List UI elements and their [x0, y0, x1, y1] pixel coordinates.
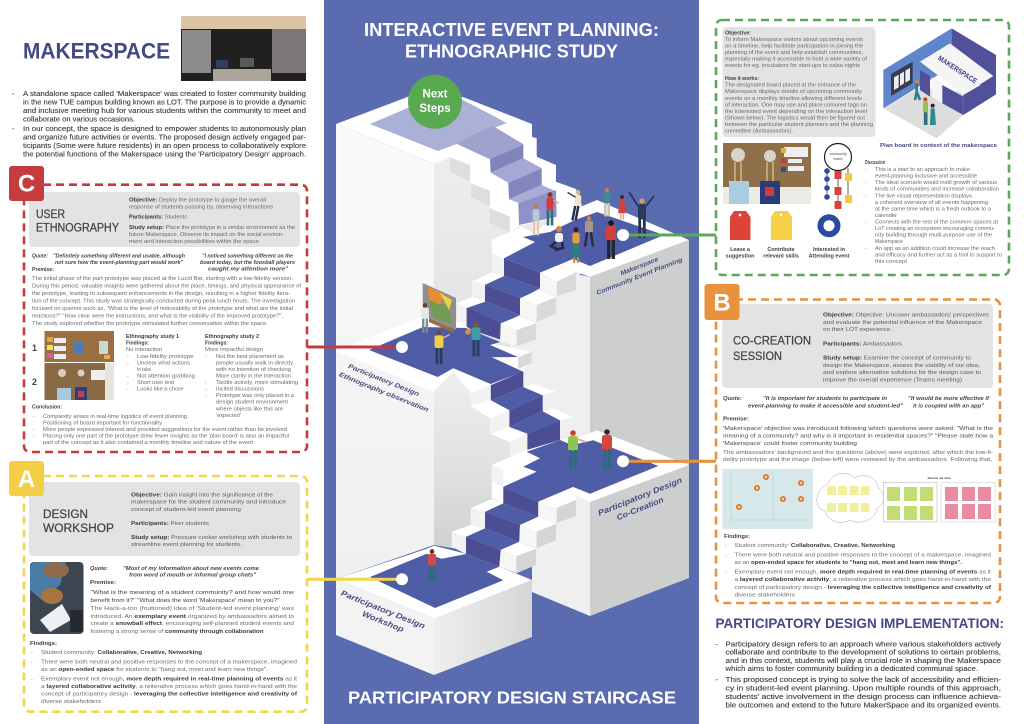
findings B: Findings:: [724, 534, 750, 540]
badge B: B: [713, 290, 731, 316]
premise C: Premise:: [32, 267, 54, 273]
badge A: [9, 461, 44, 496]
heading: design workshop: DESIGN: [43, 509, 88, 521]
isometric makerspace illustration: MAKERSPACE: [936, 53, 979, 86]
findings A: as an open-ended space for students to "hang out, meet and learn new things".: [41, 667, 268, 673]
study summary A: makerspace for the student community and introduce: [131, 500, 286, 506]
implementation text: Participatory design refers to an approach where various stakeholders actively: [726, 642, 1002, 648]
findings A: [30, 641, 298, 705]
quotes B: [723, 396, 990, 410]
board: review our idea: [884, 476, 995, 522]
findings study 1: to take: [137, 367, 151, 373]
findings A: concept of participatory design - leveraging the collective intelligence and creativity of: [41, 692, 297, 698]
findings study 1: -: [127, 380, 129, 386]
findings study 1: Unclear what actions: [137, 360, 190, 366]
center panel background: [324, 0, 699, 724]
findings study 2: design student environment: [216, 400, 289, 406]
discussion: -: [865, 180, 867, 186]
discussion: -: [865, 194, 867, 200]
objective and how it works: [725, 30, 873, 134]
study summary A: Study setup: Pressure cooker workshop with students to: [131, 535, 292, 541]
objective and how it works: planning of the event and help establish communities,: [725, 50, 863, 56]
implementation text: collaborate and contribute to the development of solutions to certain problems,: [726, 650, 1001, 656]
heading: user ethnography: [36, 209, 119, 234]
discussion: calender: [875, 213, 897, 219]
discussion: -: [865, 220, 867, 226]
caption: plan board: Plan board in context of the makerspace: [880, 143, 997, 149]
isometric staircase illustration: [336, 96, 689, 675]
study summary B: improve the overall experience (Teams meeting): [823, 378, 962, 384]
findings A: a layered collaborative activity , a reiterative process which goes hand-in-hand with the: [41, 684, 297, 690]
findings study 2: with no intention of checking: [216, 367, 291, 373]
study summary B: on their LOT experience.: [823, 327, 893, 333]
tag: contribute relevant skills: [763, 211, 799, 260]
heading: co-creation session: SESSION: [733, 349, 782, 363]
staircase labels: [338, 256, 684, 634]
connector dots and lines: [307, 229, 716, 585]
staircase labels: Makerspace: [620, 256, 660, 277]
objective and how it works: The designated board placed at the entrance of the: [725, 82, 856, 88]
conclusion C: More people expressed interest and provided suggestions for the event rather than be involved: [43, 427, 287, 433]
intro text: collaborate on various occasions.: [23, 116, 135, 123]
implementation text: This proposed concept is trying to solve the lack of accessibility and efficien-: [726, 677, 1002, 684]
findings study 2: More clarity in the interaction: [216, 374, 291, 380]
intro text: A standalone space called 'Makerspace' was created to foster community building: [23, 91, 306, 98]
objective and how it works: of interaction. One may use and place coloured tags on: [725, 102, 867, 108]
objective and how it works: events for eg. incubators for start-ups to salsa nights: [725, 63, 860, 69]
discussion: and efficacy and further act as a tool to support to: [875, 252, 1002, 258]
discussion: a coherent overview of all events happening: [875, 200, 988, 206]
intro text: in the new TUE campus building known as LOT. The purpose is to provide a dynamic: [23, 100, 307, 106]
staircase labels: Ethnography observation: [338, 371, 429, 414]
quotes B: "It would be more effective if: [908, 396, 990, 402]
findings A: -: [31, 676, 33, 682]
premise B: 'Makerspace' could foster community building: [723, 441, 857, 447]
quotes C: [32, 254, 295, 272]
next steps badge: Next: [423, 89, 448, 101]
conclusion C: Positioning of board important for functionality: [43, 420, 162, 426]
findings B: -: [725, 543, 727, 549]
discussion: The ideal scenario would instil growth of various: [875, 180, 997, 186]
quotes C: Quote:: [32, 254, 48, 260]
study summary C: ment and interaction possibilities within the space: [129, 239, 259, 245]
findings B: a layered collaborative activity , a reiterative process which goes hand-in-hand with the: [734, 577, 991, 583]
study summary B: Objective: Objective: Uncover ambassadors' perspectives: [823, 312, 989, 318]
cloud of ideas: [817, 473, 884, 522]
objective and how it works: the interested event depending on the interaction level: [725, 109, 867, 115]
intro text: -: [12, 126, 15, 133]
findings B: Exemplary event not enough, more depth required in real-time planning of events as it: [734, 570, 992, 576]
findings study 2: [205, 334, 298, 419]
findings study 2: Incited discussions: [216, 386, 264, 392]
tag: contribute relevant skills: Contribute: [767, 247, 795, 253]
findings study 1: -: [127, 354, 129, 360]
findings study 2: -: [205, 393, 207, 399]
findings B: There were both neutral and positive responses to the concept of a makerspace, imagined: [734, 552, 991, 558]
next steps badge: [408, 75, 462, 129]
intro text: and organize future activities or events. The proposed design actively engaged par-: [23, 134, 307, 142]
findings B: diverse stakeholders: [734, 592, 796, 598]
findings B: as an open-ended space for students to "hang out, meet and learn new things".: [734, 560, 963, 566]
premise B: The ambassadors' background and the questions (above) were explored, after which the low-fi-: [723, 450, 993, 456]
staircase labels: Participatory Design: [340, 589, 426, 631]
premise C: The initial phase of the part-prototype was placed at the Lucid Bar, starting with a low-fidelity version.: [32, 276, 293, 282]
quote A: Quote:: [90, 566, 108, 572]
findings B: -: [725, 570, 727, 576]
implementation text: -: [716, 677, 718, 684]
chart: idea matrix: [722, 469, 813, 529]
findings A: Exemplary event not enough, more depth required in real-time planning of events as it: [41, 676, 298, 682]
badge B: [704, 284, 740, 320]
findings study 1: Findings:: [126, 340, 149, 346]
implementation text: [716, 642, 1002, 710]
intro text: ticipants (Some were future residents) in an open process to collaboratively explore: [23, 143, 306, 150]
badge C: C: [18, 170, 35, 198]
conclusion C: Conclusion:: [32, 404, 62, 410]
implementation text: which aims to foster community building in a dedicated communal space.: [724, 666, 978, 673]
premise C: reactions?" "How clear were the instructions, and what is the visibility of the improved prototype?".: [32, 314, 283, 320]
findings study 2: 'expected': [216, 413, 241, 419]
implementation text: students' active involvement in the design process can influence achieva-: [726, 694, 1002, 701]
quotes C: caught my attention more": [208, 266, 289, 272]
premise A: "What is the meaning of a student community? and how would one: [90, 590, 294, 596]
heading: makerspace: MAKERSPACE: [23, 38, 170, 64]
intro text: In our concept, the space is designed to empower students to autonomously plan: [23, 126, 306, 133]
premise C: The study explored whether the prototype stimulated further conversation within the space.: [32, 321, 268, 327]
premise C: tion of the concept. This study was strategically conducted during peak lunch hours. The investigation: [32, 298, 295, 304]
diagram: community event tags: [824, 144, 852, 209]
premise C: [32, 267, 302, 327]
findings study 2: -: [205, 380, 207, 386]
isometric makerspace illustration: [883, 28, 996, 138]
study summary B: Participants: Ambassadors: [823, 342, 902, 348]
implementation text: ble outcomes and extend to the future MakerSpace and its organized events.: [726, 702, 1001, 710]
quotes C: board today, but the foosball players: [200, 260, 295, 266]
discussion: This is a start to an approach to make: [875, 167, 970, 173]
tag: interested in attending: Attending event: [809, 254, 850, 260]
conclusion C: -: [33, 434, 35, 440]
implementation text: cy in student-led event planning. Upon multiple rounds of this approach,: [726, 686, 1001, 692]
premise A: Premise:: [90, 580, 116, 586]
findings study 2: More impactful design: [205, 347, 263, 353]
photo: makerspace entrance: [181, 16, 306, 81]
premise A: create a snowball effect , encouraging self-planned student events and: [90, 621, 294, 627]
intro text: -: [12, 91, 15, 98]
objective and how it works: To inform Makerspace visitors about upcoming events: [725, 37, 863, 43]
premise A: benefit from it?" "What does the word 'Makerspace' mean to you?": [90, 598, 280, 604]
conclusion C: part of the concept as it also contained a monthly timeline and nature of the event: [43, 440, 254, 446]
heading: design workshop: WORKSHOP: [43, 523, 114, 535]
photo: prototype boards: [44, 331, 114, 400]
premise B: 'Makerspace' objective was introduced following which questions were asked: "What is the: [723, 426, 993, 432]
panel: event planning board (green): [716, 20, 1009, 275]
study summary A: concept of student-led event planning: [131, 507, 241, 513]
tag: leave a suggestion: [726, 211, 754, 260]
findings A: Findings:: [30, 641, 57, 647]
quotes B: it is coupled with an app": [913, 404, 985, 410]
findings study 2: Ethnography study 2: [205, 334, 259, 340]
objective and how it works: Objective:: [725, 30, 751, 36]
badge C: [9, 166, 44, 201]
implementation text: and in this context, students will play a crucial role in shaping the Makerspace: [726, 658, 1001, 665]
implementation text: -: [716, 642, 718, 648]
study summary B: design the Makerspace, assess the viability of our idea,: [823, 363, 981, 369]
conclusion C: -: [33, 414, 35, 420]
diagram: community event tags: event: [834, 157, 842, 161]
diagram: community event tags: community: [829, 152, 847, 156]
badge A: A: [18, 466, 35, 493]
findings study 1: [126, 334, 195, 392]
quotes B: event-planning to make it accessible and student-led": [748, 404, 904, 410]
study summary B: and evaluate the potential influence of the Makerspace: [823, 320, 982, 326]
heading: participatory design implementation: PARTICIPATORY DESIGN IMPLEMENTATION:: [716, 615, 1004, 631]
discussion: Makerspace: [875, 239, 903, 245]
tag: contribute relevant skills: relevant skills: [763, 254, 799, 260]
people: community group: [533, 188, 654, 263]
premise C: focused on queries such as, "What is the level of noticeability of the prototype and what are the initial: [32, 306, 293, 312]
findings A: -: [31, 660, 33, 666]
premise C: During this period, valuable insights were gathered about the place, timings, and physical appearance of: [32, 284, 302, 290]
findings B: -: [725, 552, 727, 558]
panel A: design workshop: [9, 461, 307, 712]
tag: leave a suggestion: suggestion: [726, 254, 754, 260]
intro text: [12, 91, 307, 158]
premise A: The Hack-a-ton (fruitioned) idea of 'Student-led event planning' was: [90, 606, 295, 612]
heading: co-creation session: [733, 334, 811, 363]
person: workshop: [428, 549, 436, 581]
heading: co-creation session: CO-CREATION: [733, 334, 811, 348]
quotes C: not sure how the event-planning part would work": [55, 260, 183, 266]
panel B: co-creation session: [704, 284, 1000, 603]
study summary C: Objective: Deploy the prototype to gauge the overall: [129, 198, 266, 204]
study summary A: Objective: Gain insight into the significance of the: [131, 492, 273, 498]
findings B: [724, 534, 992, 598]
premise B: delity prototype and the image (below-left) were reviewed by the ambassadors. Following that,: [723, 457, 992, 463]
next steps badge: Steps: [419, 103, 451, 115]
quote A: "Most of my information about new events come: [123, 566, 259, 572]
discussion: event-planning inclusive and accessible: [875, 174, 977, 180]
premise A: introduced. An exemplary event organized by ambassadors aimed to: [90, 614, 294, 620]
findings study 2: Findings:: [205, 340, 228, 346]
findings study 2: Not the best placement as: [216, 354, 284, 360]
conclusion C: Complexity arises in real-time logistics of event planning: [43, 414, 187, 420]
discussion: -: [865, 246, 867, 252]
people: co-creation pair: [568, 429, 612, 469]
findings study 1: -: [127, 360, 129, 366]
footer title: PARTICIPATORY DESIGN STAIRCASE: [348, 688, 676, 708]
premise B: meaning of a community? and why is it important in residential spaces?" "Please state how a: [723, 434, 994, 440]
study summary C: future Makerspace. Observe its impact on the social environ-: [129, 232, 284, 238]
findings B: Student community: Collaborative, Creative, Networking: [734, 543, 895, 549]
heading: user ethnography: USER: [36, 209, 65, 221]
study summary B: and explore alternative solutions for the design case to: [823, 370, 981, 376]
tag: interested in attending: [809, 217, 850, 260]
study summary B: [823, 312, 989, 384]
objective and how it works: events on a monthly timeline allowing different levels: [725, 96, 862, 102]
staircase labels: Co-Creation: [615, 495, 665, 522]
study summary A: streamline event planning for students.: [131, 542, 243, 548]
premise B: Premise:: [723, 416, 749, 422]
findings B: concept of participatory design - leveraging the collective intelligence and creativity of: [734, 585, 991, 591]
photo: corkboard prototype: [723, 143, 811, 204]
discussion: this concept: [875, 259, 908, 265]
findings study 2: -: [205, 354, 207, 360]
findings study 2: Prototype was only placed in a: [216, 393, 294, 399]
study summary A: Participants: Peer students: [131, 521, 209, 527]
title: INTERACTIVE EVENT PLANNING:: [364, 19, 659, 40]
board in ethnography study: [423, 283, 456, 333]
findings study 1: No interaction: [126, 347, 162, 353]
staircase labels: Community Event Planning: [595, 256, 684, 297]
objective and how it works: on a timeline, help facilitate participation in joining the: [725, 44, 863, 50]
discussion: [865, 160, 1002, 265]
discussion: -: [865, 167, 867, 173]
title: [364, 19, 659, 62]
findings study 2: where objects like this are: [216, 406, 283, 412]
panel C: user ethnography: [9, 166, 307, 452]
objective and how it works: between the particular student planners and the planning: [725, 122, 873, 128]
objective and how it works: How it works:: [725, 76, 759, 82]
discussion: An app as an addition could increase the reach: [875, 246, 995, 252]
tag: interested in attending: Interested in: [813, 247, 845, 253]
intro text: the potential functions of the Makerspace using the 'Participatory Design' approach.: [23, 152, 306, 158]
quote A: from word of mouth or informal group chats": [129, 572, 257, 578]
staircase labels: Participatory Design: [597, 476, 684, 518]
discussion: nity building through multi-purpose use of the: [875, 232, 992, 238]
conclusion C: [32, 404, 289, 446]
premise C: the prototype, leading to subsequent enhancements in the design, resulting in a higher fidelity itera-: [32, 291, 290, 297]
findings study 1: Short user test: [137, 380, 175, 386]
findings study 2: people usually walk in directly: [216, 360, 293, 366]
staircase labels: Participatory Design: [347, 363, 420, 398]
findings A: There were both neutral and positive responses to the concept of a makerspace, imagined: [41, 660, 297, 666]
quote A: [90, 566, 259, 578]
discussion: kinds of communities and increase collaboration: [875, 186, 999, 192]
study summary C: [129, 198, 295, 245]
findings study 1: Low-fidelity prototype: [137, 354, 194, 360]
study number 1: 1: [32, 343, 37, 353]
findings study 1: Looks like a chore: [137, 386, 184, 392]
study summary C: response of students passing by, observing interactions: [129, 204, 273, 210]
title: ETHNOGRAPHIC STUDY: [405, 40, 619, 62]
discussion: Connects with the rest of the common spaces at: [875, 220, 999, 226]
findings study 1: -: [127, 374, 129, 380]
study summary C: Study setup: Place the prototype in a similar environment as the: [129, 225, 295, 231]
discussion: at the same time which is a fresh outlook to a: [875, 206, 991, 212]
discussion: LoT creating an ecosystem encouraging commu-: [875, 226, 995, 232]
conclusion C: -: [33, 427, 35, 433]
intro text: and inclusive meeting hub for various students within the community to meet and: [23, 108, 306, 115]
board: review our idea: Review our idea: [928, 476, 951, 480]
objective and how it works: (Shown below). The logistics would then be figured out: [725, 116, 866, 122]
premise B: [723, 416, 994, 463]
quotes B: Quote:: [723, 396, 742, 402]
objective and how it works: Makerspace displays details of upcoming community: [725, 89, 862, 95]
heading: design workshop: [43, 509, 114, 535]
quotes B: "It is important for students to participate in: [763, 396, 888, 402]
tag: leave a suggestion: Leave a: [730, 247, 751, 253]
findings A: Student community: Collaborative, Creative, Networking: [41, 650, 202, 656]
findings study 2: Tactile activity, more stimulating: [216, 380, 298, 386]
findings A: -: [31, 650, 33, 656]
study number 2: 2: [32, 377, 37, 387]
findings A: diverse stakeholders: [41, 699, 102, 705]
quotes C: "I noticed something different on the: [202, 254, 293, 260]
photo: workshop participant: [30, 562, 84, 634]
findings study 1: Not attention grabbing: [137, 374, 195, 380]
study summary A: [131, 492, 292, 548]
heading: user ethnography: ETHNOGRAPHY: [36, 222, 119, 234]
premise A: fostering a strong sense of community through collaboration: [90, 629, 264, 635]
objective and how it works: committee (Ambassadors).: [725, 128, 793, 134]
discussion: Discussion: [865, 160, 885, 166]
quotes C: "Definitely something different and usable, although: [53, 254, 186, 260]
study summary C: Participants: Students: [129, 214, 187, 220]
conclusion C: Placing only one part of the prototype drew fewer insights as the 'plan board' is also an impactful: [43, 434, 289, 440]
findings study 1: Ethnography study 1: [126, 334, 179, 340]
discussion: The live visual representation displays: [875, 194, 972, 200]
findings study 1: -: [127, 386, 129, 392]
premise A: [90, 580, 295, 635]
people: ethnography observers: [421, 303, 480, 364]
findings study 2: -: [205, 386, 207, 392]
objective and how it works: especially making it accessible to hold a wide variety of: [725, 56, 868, 62]
staircase labels: Workshop: [361, 609, 405, 634]
study summary B: Study setup: Examine the concept of community to: [823, 356, 971, 362]
